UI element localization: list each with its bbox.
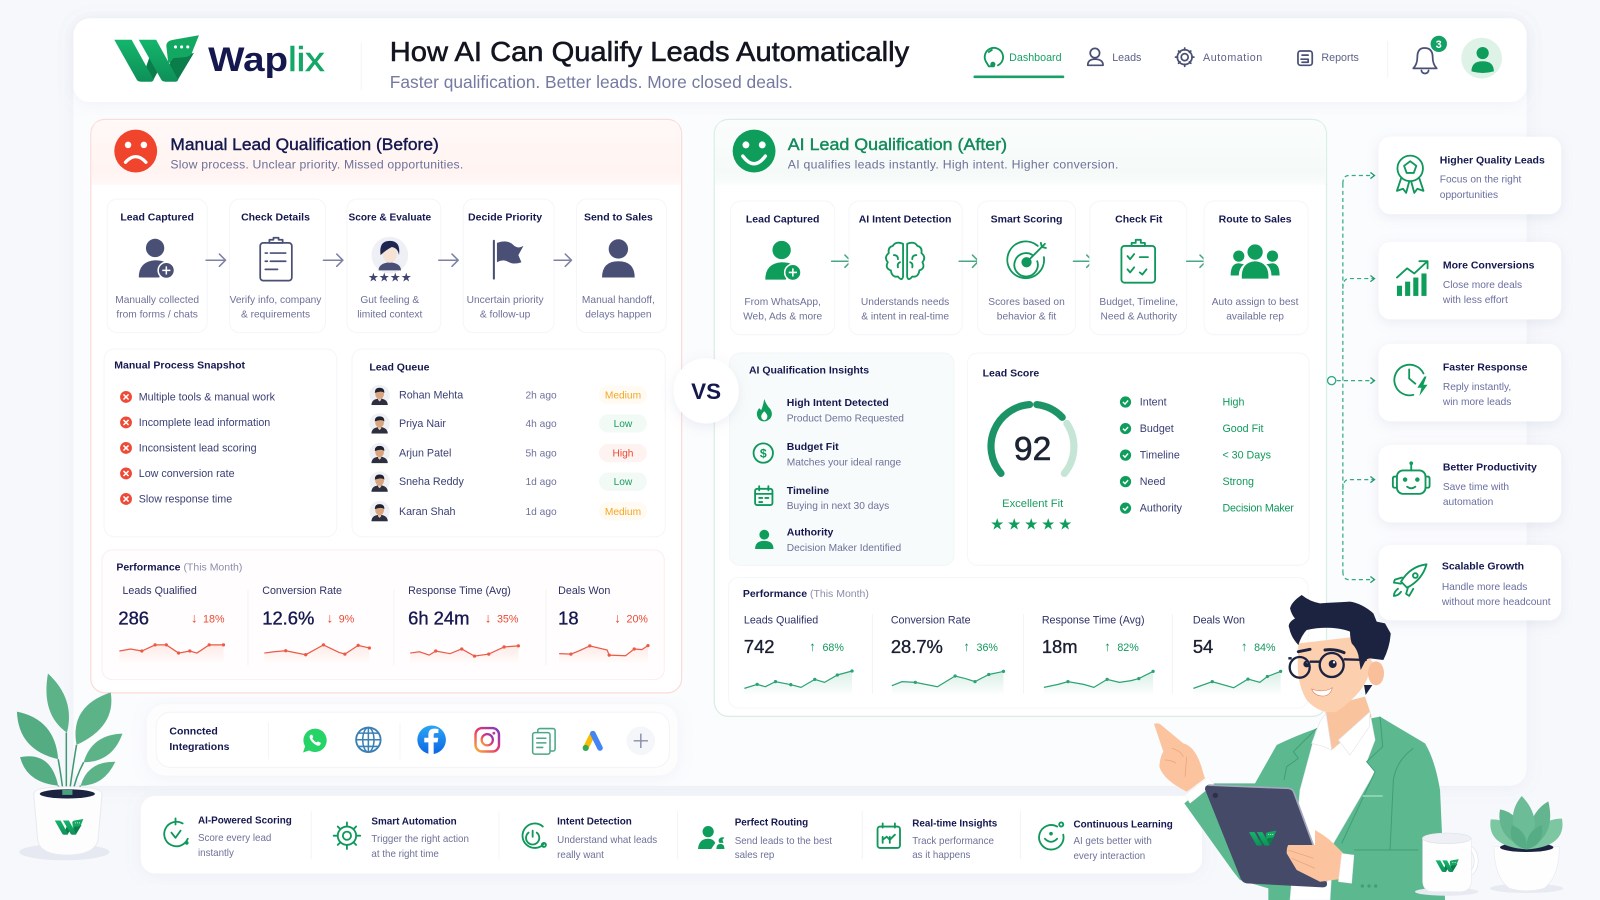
list: problems: Inconsistent lead scoring <box>139 443 257 455</box>
list: score factors <box>1120 396 1294 515</box>
step: check details: Verify info, company <box>230 295 322 306</box>
notification bell: 3 <box>1436 39 1442 51</box>
metric: response time: Response Time (Avg) <box>408 585 511 597</box>
subtitle: Faster qualification. Better leads. More closed deals. <box>390 72 793 92</box>
list: score factors: Decision Maker <box>1222 503 1294 515</box>
metric: leads qualified <box>118 585 225 663</box>
metric: ai conversion rate <box>891 614 1005 696</box>
step: ai lead captured: Web, Ads & more <box>743 311 823 322</box>
feature: continuous learning: AI gets better with <box>1073 836 1152 847</box>
step: score and evaluate <box>347 199 441 333</box>
row: Arjun Patel: High <box>612 449 633 460</box>
metric: conversion rate: 12.6% <box>262 607 314 628</box>
logo <box>114 35 324 82</box>
metric: leads qualified: Leads Qualified <box>122 585 197 597</box>
benefit: faster response: Reply instantly, <box>1443 382 1511 393</box>
list: score factors: Budget <box>1140 423 1174 435</box>
row: Karan Shah: Karan Shah <box>399 506 456 518</box>
insight: high intent: Product Demo Requested <box>787 413 904 424</box>
step: send to sales: Send to Sales <box>584 211 653 223</box>
feature: real-time insights: Track performance <box>912 836 994 847</box>
feature: real-time insights: as it happens <box>912 850 971 861</box>
benefit: faster response: win more leads <box>1442 397 1511 408</box>
benefit: better productivity: automation <box>1443 497 1493 508</box>
notification bell <box>1413 36 1447 73</box>
list: score factors: Authority <box>1140 503 1183 515</box>
benefit: faster response <box>1379 344 1561 421</box>
icon: robot <box>1393 461 1430 494</box>
metric: conversion rate <box>262 585 371 663</box>
coffee mug <box>1415 833 1478 896</box>
metric: response time: 35% <box>497 613 519 625</box>
insight: authority: Decision Maker Identified <box>787 543 901 554</box>
integrations bar: Conncted <box>169 726 218 738</box>
feature strip <box>141 796 1202 873</box>
step: ai route to sales <box>1204 201 1308 335</box>
benefit: higher quality leads <box>1379 137 1561 214</box>
row: Karan Shah <box>369 501 647 521</box>
nav: leads: Leads <box>1112 52 1141 64</box>
nav: dashboard: Dashboard <box>1009 52 1062 64</box>
step: ai intent detection: & intent in real-time <box>861 311 949 322</box>
card: lead score <box>967 353 1309 565</box>
jacket lapels <box>1284 717 1418 850</box>
row: Priya Nair: 4h ago <box>526 419 557 430</box>
feature: smart automation: Smart Automation <box>371 816 457 827</box>
row: Rohan Mehta: Medium <box>605 390 641 401</box>
pointing hand <box>1154 723 1214 803</box>
benefit: more conversions: Close more deals <box>1443 280 1522 291</box>
icon: growth chart <box>1397 261 1428 296</box>
feature: ai-powered scoring: AI-Powered Scoring <box>198 815 292 826</box>
step: check details: & requirements <box>241 309 310 320</box>
step: ai check fit: Budget, Timeline, <box>1099 297 1178 308</box>
main dashboard surface <box>73 18 1527 786</box>
arrow <box>959 255 979 267</box>
nav: automation: Automation <box>1203 52 1262 64</box>
benefit: better productivity: Better Productivity <box>1443 461 1537 473</box>
metric: ai response time: 18m <box>1042 636 1078 657</box>
step: score and evaluate: Gut feeling & <box>360 295 419 306</box>
icon: google ads <box>583 734 600 751</box>
feature: continuous learning: every interaction <box>1073 851 1145 862</box>
step: decide priority: Decide Priority <box>468 211 542 223</box>
benefit: scalable growth: Scalable Growth <box>1442 560 1524 572</box>
plant leaves <box>17 673 122 794</box>
card: lead score: Lead Score <box>983 368 1039 380</box>
list: score factors: < 30 Days <box>1222 450 1271 462</box>
gauge: Excellent Fit <box>1002 498 1064 510</box>
vs badge: VS <box>691 379 721 404</box>
metric: ai deals won <box>1193 614 1282 696</box>
nav: leads <box>1088 48 1141 65</box>
arrow <box>1187 255 1206 267</box>
row: Rohan Mehta <box>369 385 647 405</box>
step: check details: Check Details <box>241 211 310 223</box>
metric: conversion rate: Conversion Rate <box>262 585 342 597</box>
row: Sneha Reddy: Sneha Reddy <box>399 476 464 488</box>
panel: ai after <box>714 119 1327 716</box>
step: decide priority: Uncertain priority <box>467 295 545 306</box>
card: manual process snapshot: Manual Process Snapshot <box>114 359 245 371</box>
step: decide priority <box>463 199 554 333</box>
shirt <box>1290 713 1375 900</box>
arrow <box>1073 255 1093 267</box>
metric: ai leads qualified: Leads Qualified <box>744 614 818 626</box>
benefit: better productivity: Save time with <box>1443 482 1509 493</box>
step: ai check fit: Need & Authority <box>1101 311 1178 322</box>
icon: instagram <box>476 728 499 752</box>
benefit: higher quality leads: Higher Quality Leads <box>1440 154 1545 166</box>
metric: ai leads qualified: 742 <box>744 636 775 657</box>
icon: award ribbon <box>1397 156 1423 193</box>
step: ai smart scoring <box>978 201 1076 335</box>
benefit: higher quality leads: Focus on the right <box>1440 175 1522 186</box>
metric: conversion rate: 9% <box>339 613 355 625</box>
feature: perfect routing: sales rep <box>735 850 775 861</box>
insight: timeline: Buying in next 30 days <box>787 501 889 512</box>
nav: reports <box>1298 51 1359 65</box>
panel: manual before <box>91 119 682 693</box>
metric: ai response time <box>1042 614 1155 696</box>
card: lead queue <box>352 349 665 537</box>
subheading: ai: AI qualifies leads instantly. High intent. Higher conversion. <box>788 157 1118 171</box>
jacket <box>1184 717 1445 900</box>
step: send to sales <box>577 199 666 333</box>
step: score and evaluate: limited context <box>357 309 423 320</box>
step: ai lead captured: Lead Captured <box>746 213 819 225</box>
icon: add <box>627 727 655 755</box>
connector lines to benefits <box>1328 172 1374 583</box>
gauge <box>990 405 1075 534</box>
list: score factors: Need <box>1140 476 1165 488</box>
insight: budget fit: $ <box>760 447 767 461</box>
row: Karan Shah: 1d ago <box>526 507 557 518</box>
user avatar <box>1461 38 1502 79</box>
header bar <box>73 18 1527 102</box>
feature: real-time insights <box>878 819 998 861</box>
metric: leads qualified: ↓ <box>191 610 197 625</box>
step: ai intent detection <box>849 201 962 335</box>
step: ai smart scoring: Scores based on <box>988 297 1065 308</box>
feature: real-time insights: Real-time Insights <box>912 819 998 830</box>
metric: ai response time: Response Time (Avg) <box>1042 614 1145 626</box>
metric: leads qualified: 18% <box>203 613 225 625</box>
card: performance manual <box>102 550 664 680</box>
feature: ai-powered scoring: Score every lead <box>198 833 271 844</box>
step: ai check fit <box>1090 201 1187 335</box>
icon: whatsapp <box>303 729 327 753</box>
feature: intent detection: really want <box>557 850 604 861</box>
tablet <box>1205 785 1327 887</box>
feature: ai-powered scoring <box>164 815 292 859</box>
jacket pocket <box>1363 793 1383 799</box>
row: Priya Nair <box>369 413 647 434</box>
benefit: scalable growth: Handle more leads <box>1442 582 1527 593</box>
nav: reports: Reports <box>1321 52 1359 64</box>
step: ai smart scoring: behavior & fit <box>997 311 1056 322</box>
arrow <box>439 254 458 266</box>
nav: automation <box>1176 48 1262 66</box>
icon: facebook <box>417 726 446 754</box>
metric: deals won: Deals Won <box>558 585 610 597</box>
feature: perfect routing: Send leads to the best <box>735 836 832 847</box>
list: problems: Incomplete lead information <box>139 417 270 429</box>
row: Priya Nair: Low <box>614 419 633 430</box>
metric: deals won: ↓ <box>614 610 621 625</box>
step: check details <box>230 199 326 333</box>
metric: ai leads qualified <box>744 614 854 696</box>
insight: timeline <box>755 485 889 512</box>
metric: ai deals won: 54 <box>1193 636 1213 657</box>
insight: budget fit: Budget Fit <box>787 441 839 453</box>
gauge: 92 <box>1014 431 1051 468</box>
feature: continuous learning: Continuous Learning <box>1073 820 1173 831</box>
feature: intent detection: Intent Detection <box>557 816 632 827</box>
step: ai route to sales: Route to Sales <box>1219 213 1292 225</box>
insight: timeline: Timeline <box>787 485 829 497</box>
insight: authority <box>755 527 901 554</box>
plant pot <box>34 787 102 855</box>
row: Rohan Mehta: Rohan Mehta <box>399 389 463 401</box>
metric: ai leads qualified: ↑ <box>809 639 816 654</box>
metric: ai response time: 82% <box>1117 642 1139 654</box>
metric: leads qualified: 286 <box>118 607 149 628</box>
insight: high intent: High Intent Detected <box>787 397 889 409</box>
card: performance ai <box>729 578 1308 708</box>
icon: happy face <box>733 130 776 172</box>
row: Sneha Reddy <box>369 471 647 492</box>
insight: budget fit <box>754 441 901 468</box>
step: score and evaluate: ★★★★ <box>368 271 412 285</box>
list: score factors: High <box>1222 397 1245 409</box>
shirt collar <box>1312 712 1370 755</box>
row: Arjun Patel <box>369 443 647 463</box>
metric: ai conversion rate: ↑ <box>963 639 970 654</box>
feature: intent detection <box>523 816 657 861</box>
desk succulent <box>1490 796 1563 893</box>
step: score and evaluate: Score & Evaluate <box>348 211 431 223</box>
heading: ai: AI Lead Qualification (After) <box>788 135 1007 154</box>
step: lead captured: from forms / chats <box>116 309 198 320</box>
step: ai smart scoring: Smart Scoring <box>991 213 1062 225</box>
insight: high intent <box>757 397 904 424</box>
card: ai qualification insights <box>730 353 954 565</box>
list: problems: Multiple tools & manual work <box>139 392 276 404</box>
step: ai intent detection: AI Intent Detection <box>859 213 951 225</box>
metric: ai conversion rate: 28.7% <box>891 636 943 657</box>
feature: ai-powered scoring: instantly <box>198 848 234 859</box>
row: Priya Nair: Priya Nair <box>399 418 446 430</box>
step: ai lead captured: From WhatsApp, <box>744 297 821 308</box>
step: lead captured: Manually collected <box>115 295 199 306</box>
step: ai intent detection: Understands needs <box>861 297 949 308</box>
icon: sad face <box>114 130 157 172</box>
insight: budget fit: Matches your ideal range <box>787 457 901 468</box>
benefit: scalable growth <box>1379 545 1561 620</box>
card: ai qualification insights: AI Qualification Insights <box>749 364 869 376</box>
list: problems: Slow response time <box>139 494 232 506</box>
feature: smart automation: Trigger the right action <box>371 834 469 845</box>
nav: dashboard <box>973 48 1064 78</box>
insight: authority: Authority <box>787 527 834 539</box>
icon: documents <box>533 729 555 754</box>
title: How AI Can Qualify Leads Automatically <box>390 36 909 67</box>
step: send to sales: Manual handoff, <box>582 295 655 306</box>
icon: globe <box>356 728 381 752</box>
metric: deals won: 20% <box>627 613 648 625</box>
row: Rohan Mehta: 2h ago <box>526 390 557 401</box>
list: problems <box>120 391 276 506</box>
step: ai route to sales: available rep <box>1226 311 1284 322</box>
feature: perfect routing: Perfect Routing <box>735 818 808 829</box>
arrow <box>832 255 851 267</box>
feature: smart automation <box>334 816 469 860</box>
card: manual process snapshot <box>104 349 337 537</box>
benefit: more conversions: More Conversions <box>1443 259 1535 271</box>
illustration: presenter <box>1154 595 1563 900</box>
neck <box>1325 697 1372 750</box>
step: lead captured <box>107 199 207 333</box>
metric: ai leads qualified: 68% <box>822 642 844 654</box>
step: send to sales: delays happen <box>585 309 652 320</box>
head <box>1288 595 1391 712</box>
holding hand <box>1287 830 1377 888</box>
row: Karan Shah: Medium <box>605 507 641 518</box>
benefit: more conversions: with less effort <box>1442 295 1508 306</box>
arrow <box>206 254 226 266</box>
card: lead queue: Lead Queue <box>369 361 430 373</box>
feature: smart automation: at the right time <box>371 849 439 860</box>
integrations bar: Integrations <box>169 741 230 753</box>
metric: ai deals won: 84% <box>1254 642 1276 654</box>
card: performance ai: Performance (This Month) <box>743 588 869 600</box>
step: ai check fit: Check Fit <box>1115 213 1163 225</box>
step: ai route to sales: Auto assign to best <box>1212 297 1299 308</box>
benefit: more conversions <box>1379 242 1561 319</box>
metric: ai response time: ↑ <box>1104 639 1111 654</box>
illustration: potted plant <box>17 673 122 860</box>
step: decide priority: & follow-up <box>480 309 531 320</box>
metric: response time: ↓ <box>485 610 491 625</box>
subheading: manual: Slow process. Unclear priority. Missed opportunities. <box>170 157 463 171</box>
list: score factors: Intent <box>1140 397 1167 409</box>
arrow <box>554 254 571 266</box>
heading: manual: Manual Lead Qualification (Before) <box>170 135 439 154</box>
row: Arjun Patel: 5h ago <box>526 449 557 460</box>
metric: deals won: 18 <box>558 607 579 628</box>
metric: conversion rate: ↓ <box>327 610 333 625</box>
metric: response time <box>408 585 520 663</box>
step: lead captured: Lead Captured <box>120 211 194 223</box>
metric: ai conversion rate: Conversion Rate <box>891 614 971 626</box>
metric: ai deals won: ↑ <box>1241 639 1247 654</box>
arrow <box>323 254 343 266</box>
list: problems: Low conversion rate <box>139 468 235 480</box>
benefit: higher quality leads: opportunities <box>1440 190 1498 201</box>
logo: Waplix <box>208 41 324 79</box>
vs badge <box>673 358 739 423</box>
integrations bar <box>147 704 678 776</box>
icon: rocket <box>1394 564 1427 596</box>
feature: perfect routing <box>698 818 832 861</box>
list: score factors: Good Fit <box>1222 423 1264 435</box>
metric: response time: 6h 24m <box>408 607 469 628</box>
icon: clock bolt <box>1394 365 1428 396</box>
list: score factors: Strong <box>1222 476 1254 488</box>
benefit: scalable growth: without more headcount <box>1441 597 1551 608</box>
metric: deals won <box>558 585 650 663</box>
row: Sneha Reddy: Low <box>614 477 633 488</box>
row: Arjun Patel: Arjun Patel <box>399 448 451 460</box>
metric: ai conversion rate: 36% <box>977 642 998 654</box>
list: score factors: Timeline <box>1140 450 1180 462</box>
feature: continuous learning <box>1039 820 1173 862</box>
card: performance manual: Performance (This Month) <box>116 561 242 573</box>
benefit: better productivity <box>1379 445 1561 522</box>
gauge: ★★★★★ <box>990 515 1075 534</box>
metric: ai deals won: Deals Won <box>1193 614 1245 626</box>
feature: intent detection: Understand what leads <box>557 835 657 846</box>
benefit: faster response: Faster Response <box>1443 361 1528 373</box>
step: ai lead captured <box>731 201 835 335</box>
row: Sneha Reddy: 1d ago <box>526 477 557 488</box>
